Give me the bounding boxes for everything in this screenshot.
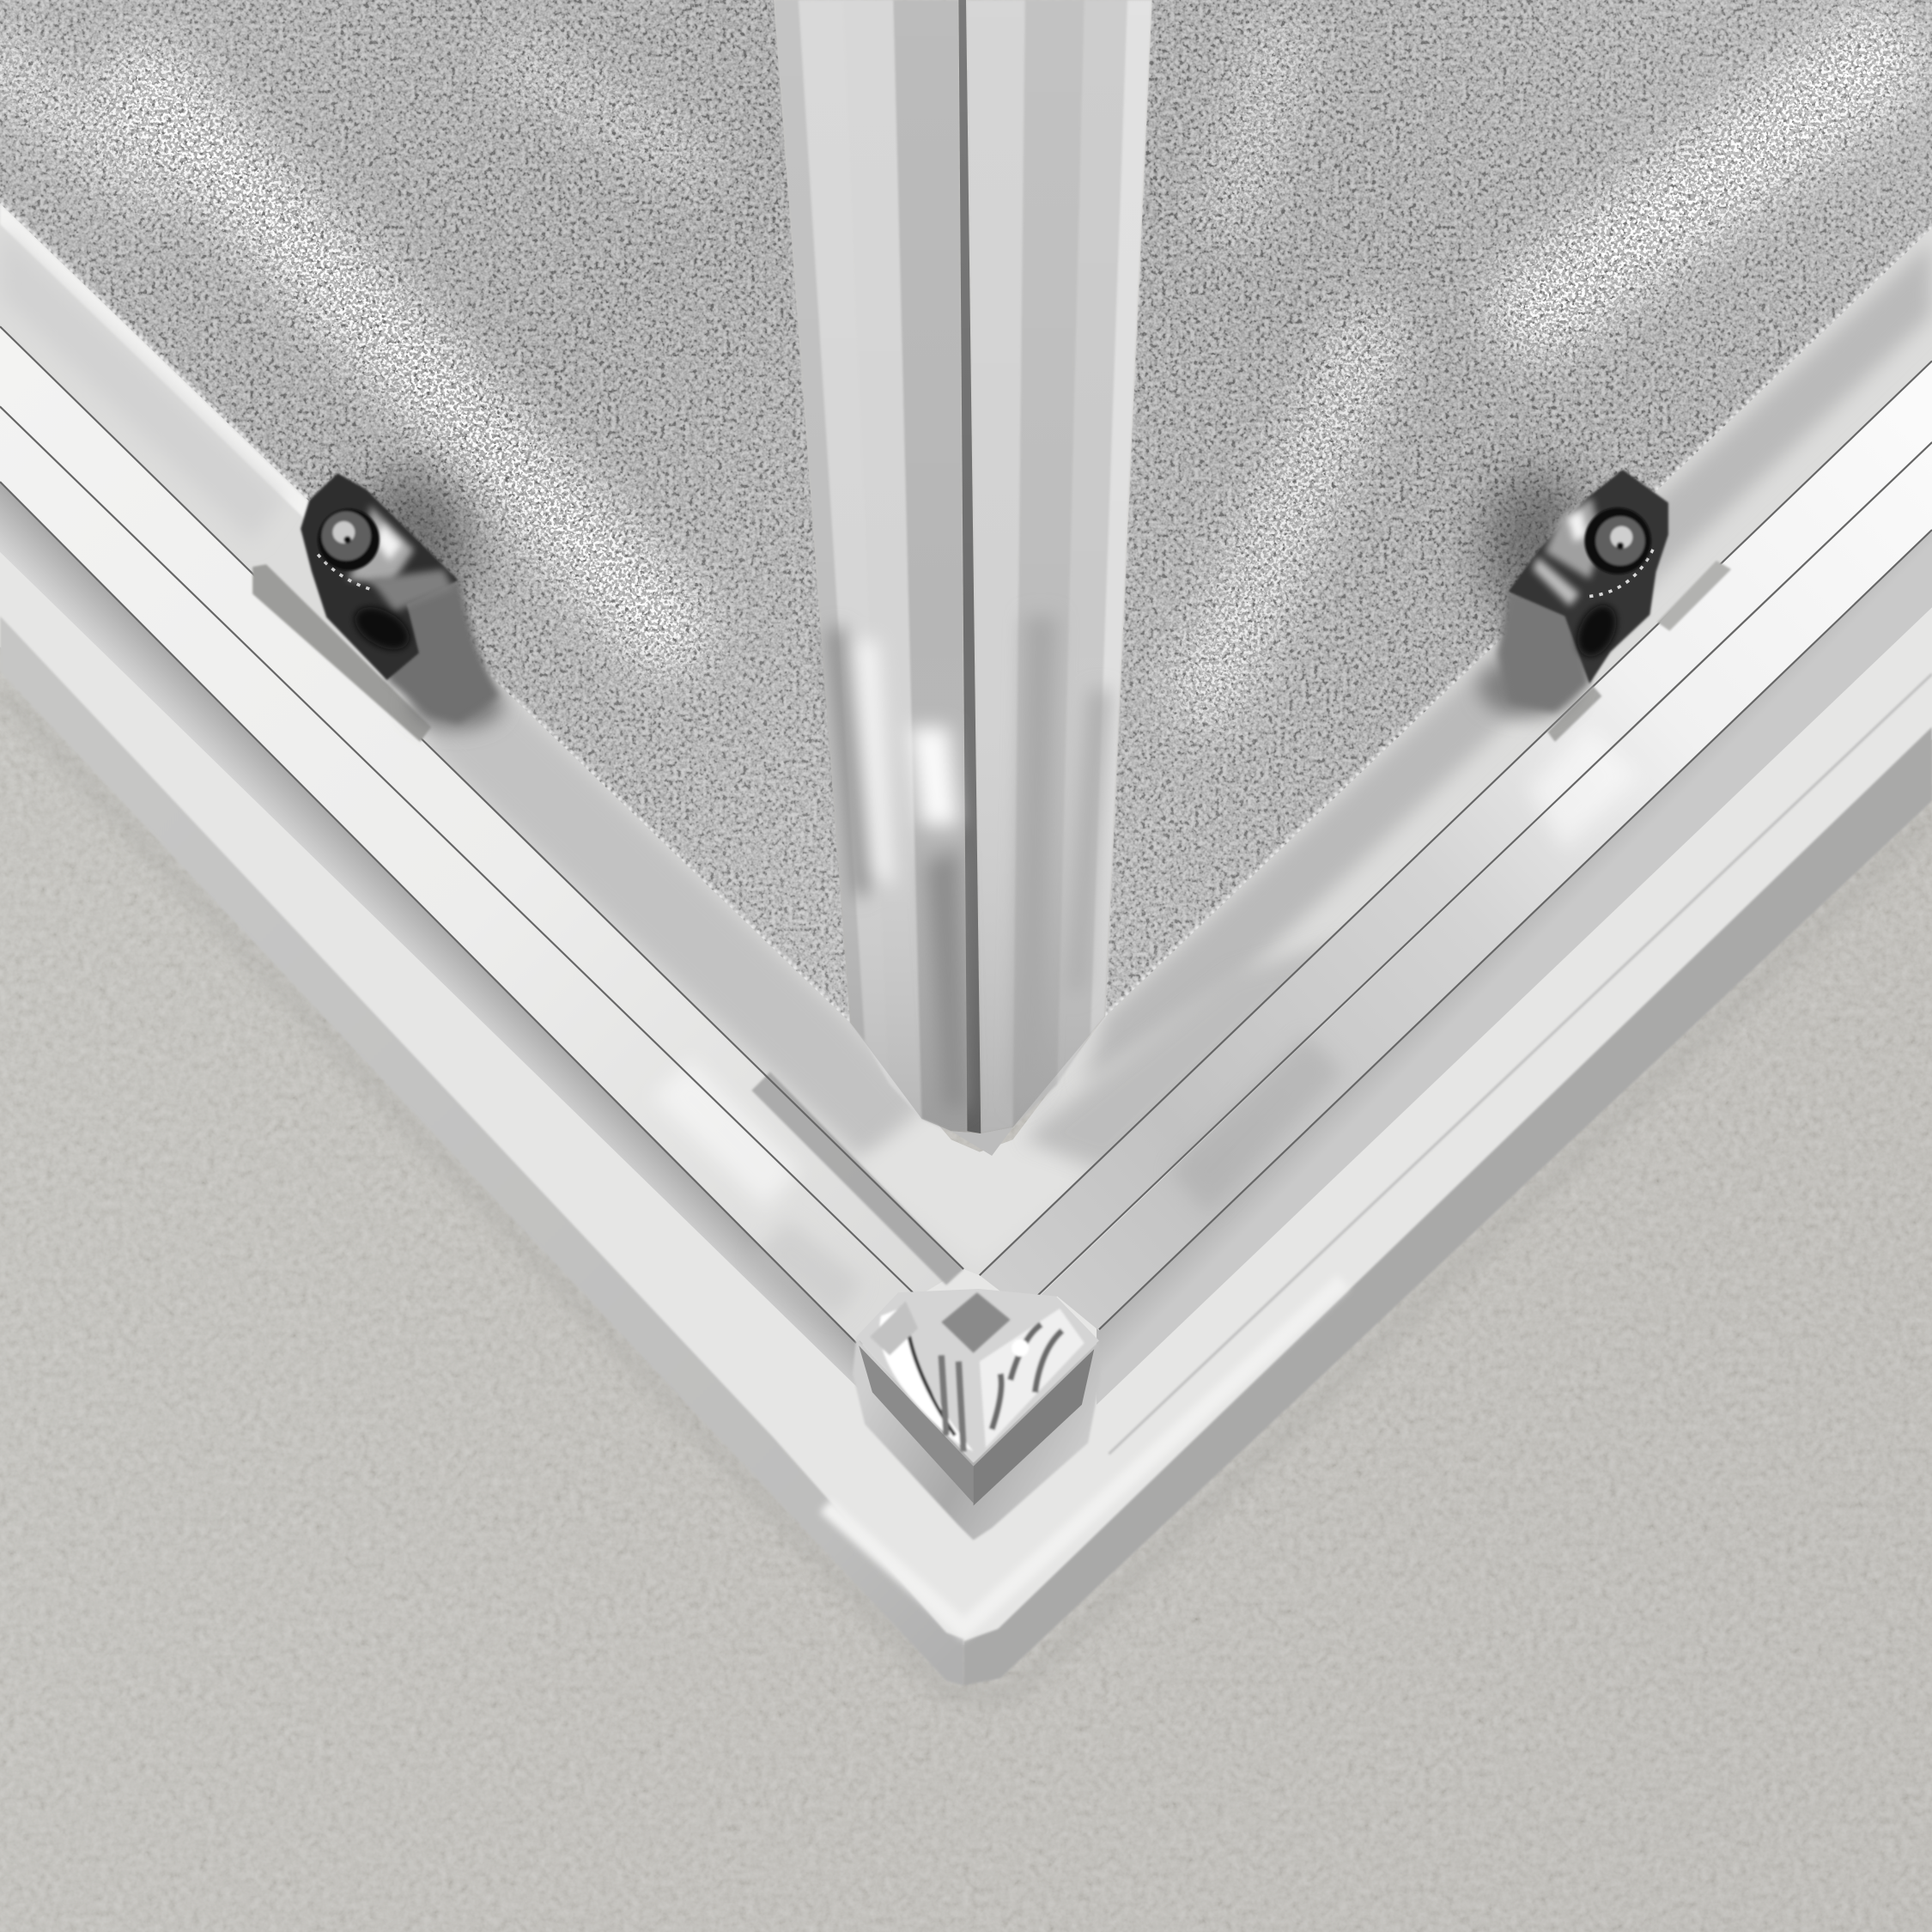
- left hinge studded curve: [318, 555, 369, 589]
- column foot shadow: [951, 1127, 1013, 1156]
- tray highlight at apex: [825, 1281, 1343, 1629]
- column seam: [958, 0, 981, 1133]
- shadow strip beneath right rail: [1097, 527, 1932, 1405]
- left hinge lower body: [387, 580, 499, 723]
- glass edge bead: [0, 204, 850, 1023]
- hinge shadow on glass: [1482, 472, 1593, 625]
- tray left side face: [0, 616, 963, 1686]
- left roller hinge: [252, 473, 502, 742]
- column reflections: [828, 616, 1109, 1109]
- column shading: [774, 0, 1152, 1133]
- corner cap: [853, 1289, 1100, 1540]
- right hinge dark recess: [1570, 599, 1624, 663]
- channel light tile: [866, 1111, 1025, 1168]
- right hinge cap: [1508, 470, 1668, 683]
- hinge shadow on glass: [354, 472, 472, 625]
- tray right side face: [963, 727, 1932, 1686]
- tray top surface: [0, 474, 1932, 1645]
- frosted glass panel left: [0, 0, 862, 1035]
- corner cap body: [853, 1337, 1100, 1540]
- right roller hinge: [1479, 470, 1731, 742]
- column shadow: [1025, 939, 1327, 1170]
- shower tray: [0, 474, 1932, 1686]
- shadow strip beneath left rail: [0, 483, 862, 1392]
- channel right grey band: [1084, 240, 1932, 1084]
- left hinge bright band: [348, 505, 414, 584]
- left rail outer band: [0, 408, 918, 1343]
- corner cap reflections: [870, 1301, 1084, 1451]
- column base strips: [774, 0, 1152, 1133]
- left rail grey strip: [751, 1072, 963, 1285]
- left hinge shadow on frame: [409, 680, 502, 729]
- thin tray line right: [1109, 674, 1932, 1454]
- right hinge studded curve: [1589, 549, 1654, 597]
- aluminium rails: [0, 326, 1932, 1343]
- central aluminium column: [774, 0, 1152, 1156]
- left hinge track plate: [252, 564, 431, 742]
- right hinge track plates: [1547, 686, 1601, 742]
- right rail inner band: [980, 361, 1932, 1309]
- frame channel: [0, 185, 1932, 1294]
- right hinge lower body: [1497, 592, 1589, 712]
- corner cap polished top: [856, 1289, 1099, 1462]
- frosted glass panel right: [1097, 0, 1932, 1035]
- floor shadow beside tray: [0, 690, 1932, 1694]
- left hinge dark recess: [348, 598, 416, 658]
- left hinge screw: [318, 509, 380, 570]
- corner cap recess: [941, 1292, 1011, 1353]
- left hinge cap: [301, 473, 459, 680]
- right hinge screw: [1584, 507, 1651, 574]
- channel left highlight: [0, 204, 309, 517]
- corner cap dark lower faces: [859, 1346, 974, 1504]
- brushed patches on rails: [653, 727, 1638, 1318]
- right rail outer band: [1023, 444, 1932, 1331]
- rail seam lines: [0, 326, 1932, 1343]
- channel left grey band: [424, 680, 918, 1156]
- right hinge bright band: [1545, 498, 1601, 579]
- right hinge shadow on frame: [1479, 658, 1577, 717]
- glass edge bead: [1105, 228, 1932, 1017]
- left rail inner band: [0, 326, 963, 1297]
- channel upper left tone: [7, 235, 283, 524]
